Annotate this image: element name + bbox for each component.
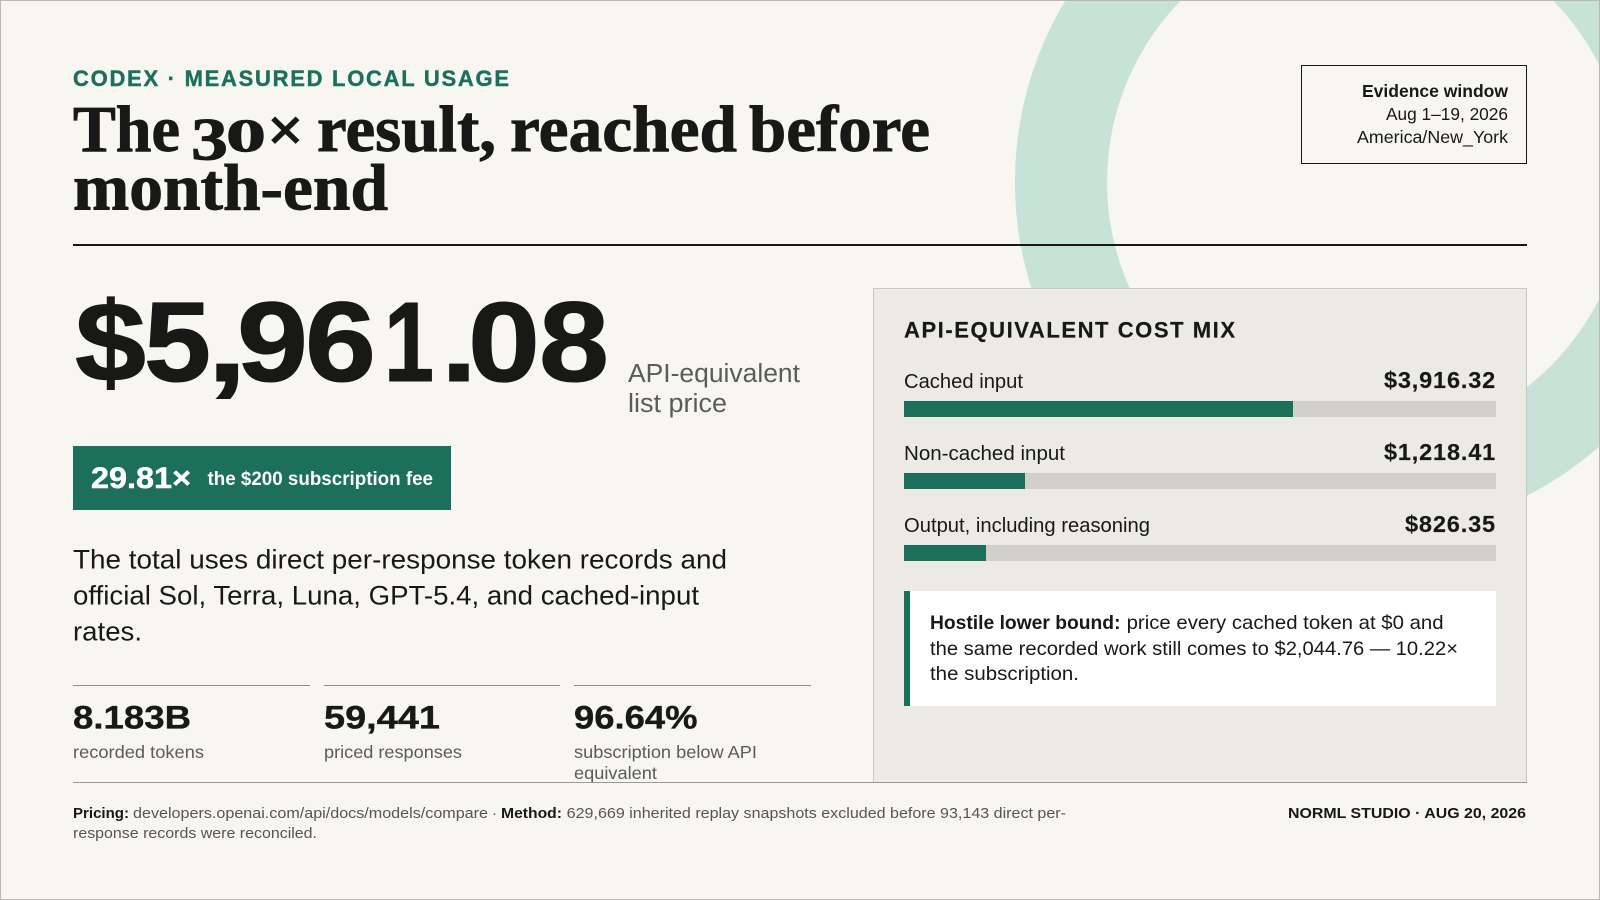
description paragraph: official Sol, Terra, Luna, GPT-5.4, and cached-input	[73, 580, 700, 610]
title: reached	[510, 94, 737, 166]
stat: subscription below API equivalent	[574, 685, 811, 783]
row: non-cached input	[904, 439, 1496, 489]
headline figure: 6	[305, 279, 376, 405]
callout: hostile lower bound: price every cached token at $0 and	[1127, 612, 1444, 634]
headline figure	[75, 279, 800, 418]
title: result,	[317, 94, 496, 166]
evidence window box: Aug 1–19, 2026	[1386, 104, 1508, 124]
row: non-cached input: $1,218.41	[1384, 439, 1496, 465]
stat: priced responses: priced responses	[324, 742, 462, 762]
title: 3	[191, 106, 228, 172]
headline figure: .	[441, 279, 477, 405]
headline figure: ,	[207, 279, 247, 405]
footer source note: 629,669 inherited replay snapshots excluded before 93,143 direct per-	[567, 805, 1066, 822]
title: month-end	[73, 152, 388, 224]
footer source note: response records were reconciled.	[73, 825, 317, 842]
evidence window box: America/New_York	[1357, 127, 1508, 148]
footer credit: NORML STUDIO · AUG 20, 2026	[1288, 805, 1526, 822]
headline figure: API-equivalent	[628, 360, 800, 388]
callout: hostile lower bound: Hostile lower bound:	[930, 612, 1120, 634]
footer source note: Pricing:	[73, 805, 129, 822]
footer source note: Method:	[501, 805, 562, 822]
row: cached input: $3,916.32	[1384, 367, 1496, 393]
footer baseline rule	[73, 782, 1527, 783]
title	[73, 94, 930, 224]
title: ×	[267, 97, 304, 165]
callout: hostile lower bound: the same recorded work still comes to $2,044.76 — 10.22×	[930, 638, 1458, 660]
description paragraph: The total uses direct per-response token records and	[73, 544, 727, 574]
footer source note: developers.openai.com/api/docs/models/compare	[133, 805, 488, 822]
stat: recorded tokens: recorded tokens	[73, 742, 204, 762]
row: output including reasoning: Output, including reasoning	[904, 514, 1150, 537]
stat: subscription below API equivalent: 96.64%	[574, 700, 698, 736]
stat: recorded tokens	[73, 685, 310, 762]
headline figure: 5	[144, 279, 211, 405]
title: before	[749, 94, 930, 166]
eyebrow: CODEX · MEASURED LOCAL USAGE	[73, 66, 509, 91]
multiple badge: 29.81×	[91, 462, 191, 495]
stat: recorded tokens: 8.183B	[73, 700, 191, 736]
callout: hostile lower bound	[904, 591, 1496, 706]
panel heading: API-EQUIVALENT COST MIX	[904, 318, 1235, 342]
multiple badge	[73, 446, 451, 510]
headline figure: list price	[628, 390, 727, 418]
row: cached input	[904, 367, 1496, 417]
headline figure: 9	[237, 279, 308, 405]
headline figure: $	[75, 279, 146, 405]
row: output including reasoning	[904, 511, 1496, 561]
description paragraph	[73, 544, 727, 646]
row: non-cached input: Non-cached input	[904, 442, 1065, 465]
decorative ring	[1061, 0, 1600, 488]
row: cached input: Cached input	[904, 370, 1023, 393]
headline figure: 8	[539, 279, 609, 405]
row: output including reasoning: $826.35	[1405, 511, 1496, 537]
panel: cost mix	[874, 288, 1526, 782]
footer source note	[73, 805, 1066, 842]
evidence window box	[1302, 66, 1526, 164]
stat: subscription below API equivalent: equivalent	[574, 763, 657, 783]
title: 0	[226, 110, 266, 162]
multiple badge: the $200 subscription fee	[208, 469, 433, 490]
headline figure: 0	[468, 279, 540, 405]
headline figure: 1	[384, 279, 434, 405]
callout: hostile lower bound: the subscription.	[930, 663, 1079, 685]
stat: priced responses: 59,441	[324, 700, 440, 736]
title: The	[73, 94, 180, 166]
header rule	[73, 244, 1527, 246]
stat: priced responses	[324, 685, 560, 762]
footer source note: ·	[492, 805, 497, 822]
stat: subscription below API equivalent: subscription below API	[574, 742, 757, 762]
evidence window box: Evidence window	[1362, 81, 1508, 101]
description paragraph: rates.	[73, 616, 142, 646]
